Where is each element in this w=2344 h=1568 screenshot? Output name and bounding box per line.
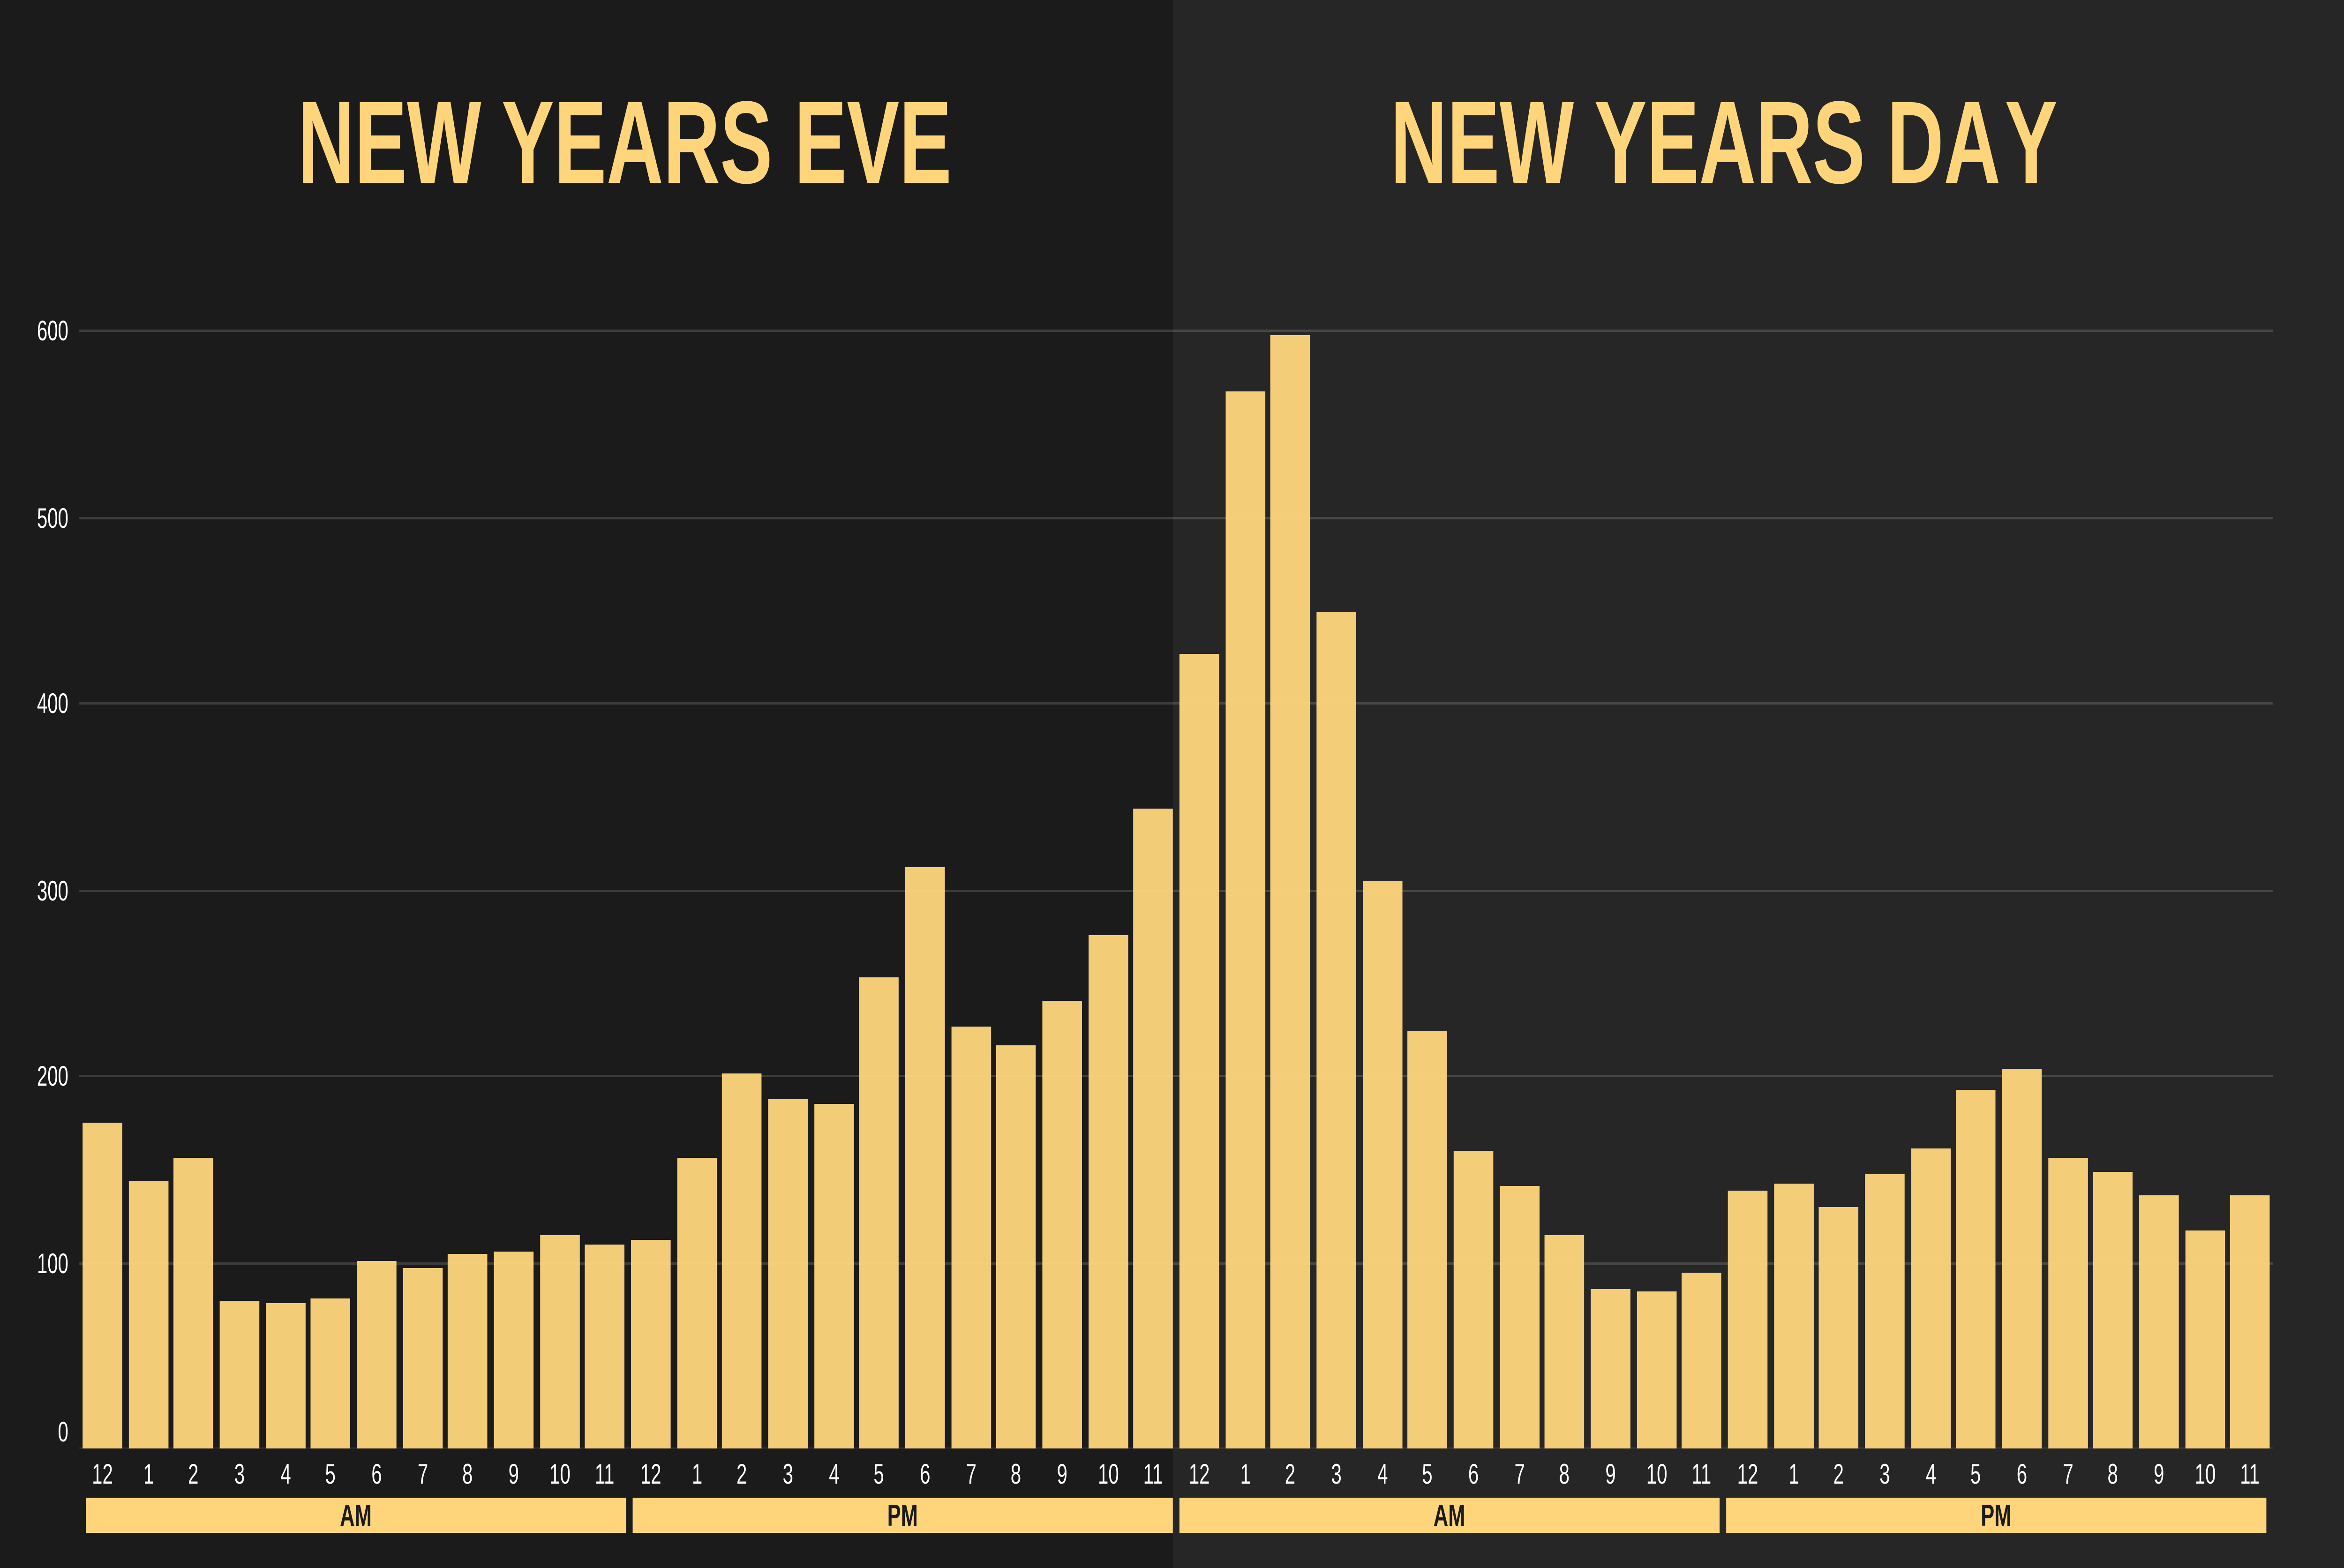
hours: new years day AM: 1 (1240, 1458, 1251, 1490)
hours: new years eve AM: 11 (595, 1458, 614, 1490)
hours: new years day AM: 4 (1377, 1458, 1388, 1490)
hours: new years day PM: 11 (2240, 1458, 2260, 1490)
hours: new years eve PM: 10 (1098, 1458, 1119, 1490)
hours: new years day PM: 2 (1833, 1458, 1844, 1490)
panel: new years day background (1173, 0, 2344, 1568)
hours: new years eve PM: 3 (783, 1458, 793, 1490)
hours: new years day AM: 8 (1559, 1458, 1570, 1490)
hours: new years day AM: 7 (1515, 1458, 1525, 1490)
band: eve AM (86, 1498, 626, 1533)
hours: new years day PM (1737, 1458, 2260, 1490)
bars: new years eve AM (83, 1123, 624, 1448)
hours: new years eve AM: 5 (325, 1458, 336, 1490)
hours: new years eve PM: 11 (1143, 1458, 1163, 1490)
AM/PM band labels (340, 1498, 2012, 1532)
hours: new years day AM: 11 (1691, 1458, 1711, 1490)
hours: new years eve PM: 1 (692, 1458, 702, 1490)
hours: new years eve PM: 6 (920, 1458, 930, 1490)
hours: new years eve PM (640, 1458, 1163, 1490)
hours: new years eve AM: 3 (234, 1458, 245, 1490)
band: day AM (1180, 1498, 1720, 1533)
hours: new years eve PM: 7 (966, 1458, 977, 1490)
hours: new years day AM: 12 (1189, 1458, 1210, 1490)
hours: new years eve AM: 10 (549, 1458, 571, 1490)
hours: new years eve PM: 2 (736, 1458, 747, 1490)
panel: new years eve background (0, 0, 1173, 1568)
hours: new years day AM: 3 (1331, 1458, 1342, 1490)
AM/PM bands (86, 1498, 2266, 1533)
y axis labels: 400 (37, 688, 68, 719)
hours: new years day PM: 10 (2195, 1458, 2216, 1490)
AM/PM band labels: PM (887, 1498, 918, 1532)
x axis hour labels (92, 1458, 2260, 1490)
hours: new years day PM: 1 (1788, 1458, 1799, 1490)
hours: new years day AM (1189, 1458, 1711, 1490)
hours: new years eve PM: 9 (1057, 1458, 1067, 1490)
hours: new years eve AM: 7 (418, 1458, 428, 1490)
hours: new years day PM: 6 (2017, 1458, 2027, 1490)
hours: new years eve PM: 12 (640, 1458, 661, 1490)
title: new years day: NEW YEARS DAY (1390, 77, 2058, 208)
hours: new years eve AM: 12 (92, 1458, 113, 1490)
hours: new years eve PM: 8 (1011, 1458, 1021, 1490)
AM/PM band labels: PM (1981, 1498, 2012, 1532)
title: new years eve: NEW YEARS EVE (298, 77, 952, 208)
hours: new years eve AM: 2 (188, 1458, 198, 1490)
AM/PM band labels: AM (340, 1498, 372, 1532)
y axis labels (37, 315, 68, 1448)
hours: new years day AM: 2 (1285, 1458, 1295, 1490)
band: day PM (1726, 1498, 2266, 1533)
hours: new years day PM: 4 (1926, 1458, 1936, 1490)
bars: new years day AM (1180, 335, 1721, 1448)
titles (298, 77, 2058, 208)
band: eve PM (633, 1498, 1173, 1533)
hours: new years eve AM: 4 (280, 1458, 291, 1490)
y axis labels: 500 (37, 503, 68, 534)
hours: new years day PM: 3 (1879, 1458, 1890, 1490)
bars: new years day PM (1728, 1069, 2269, 1448)
hours: new years day AM: 5 (1422, 1458, 1433, 1490)
y axis labels: 300 (37, 875, 68, 907)
hours: new years eve AM (92, 1458, 614, 1490)
hours: new years day AM: 10 (1646, 1458, 1667, 1490)
y axis labels: 600 (37, 315, 68, 346)
hours: new years eve AM: 1 (143, 1458, 154, 1490)
y axis labels: 200 (37, 1060, 68, 1092)
hours: new years eve PM: 4 (829, 1458, 840, 1490)
hours: new years eve AM: 8 (462, 1458, 473, 1490)
bars: new years eve PM (631, 809, 1173, 1448)
hours: new years day PM: 12 (1737, 1458, 1758, 1490)
hours: new years day PM: 8 (2108, 1458, 2118, 1490)
hours: new years day PM: 7 (2063, 1458, 2074, 1490)
hours: new years eve AM: 9 (509, 1458, 519, 1490)
bar chart (83, 335, 2269, 1448)
hours: new years day AM: 6 (1468, 1458, 1479, 1490)
hours: new years day AM: 9 (1605, 1458, 1616, 1490)
hours: new years eve AM: 6 (371, 1458, 382, 1490)
y axis labels: 100 (37, 1248, 68, 1279)
AM/PM band labels: AM (1434, 1498, 1465, 1532)
hours: new years eve PM: 5 (873, 1458, 884, 1490)
hours: new years day PM: 9 (2154, 1458, 2164, 1490)
hours: new years day PM: 5 (1970, 1458, 1981, 1490)
y axis labels: 0 (58, 1416, 68, 1448)
